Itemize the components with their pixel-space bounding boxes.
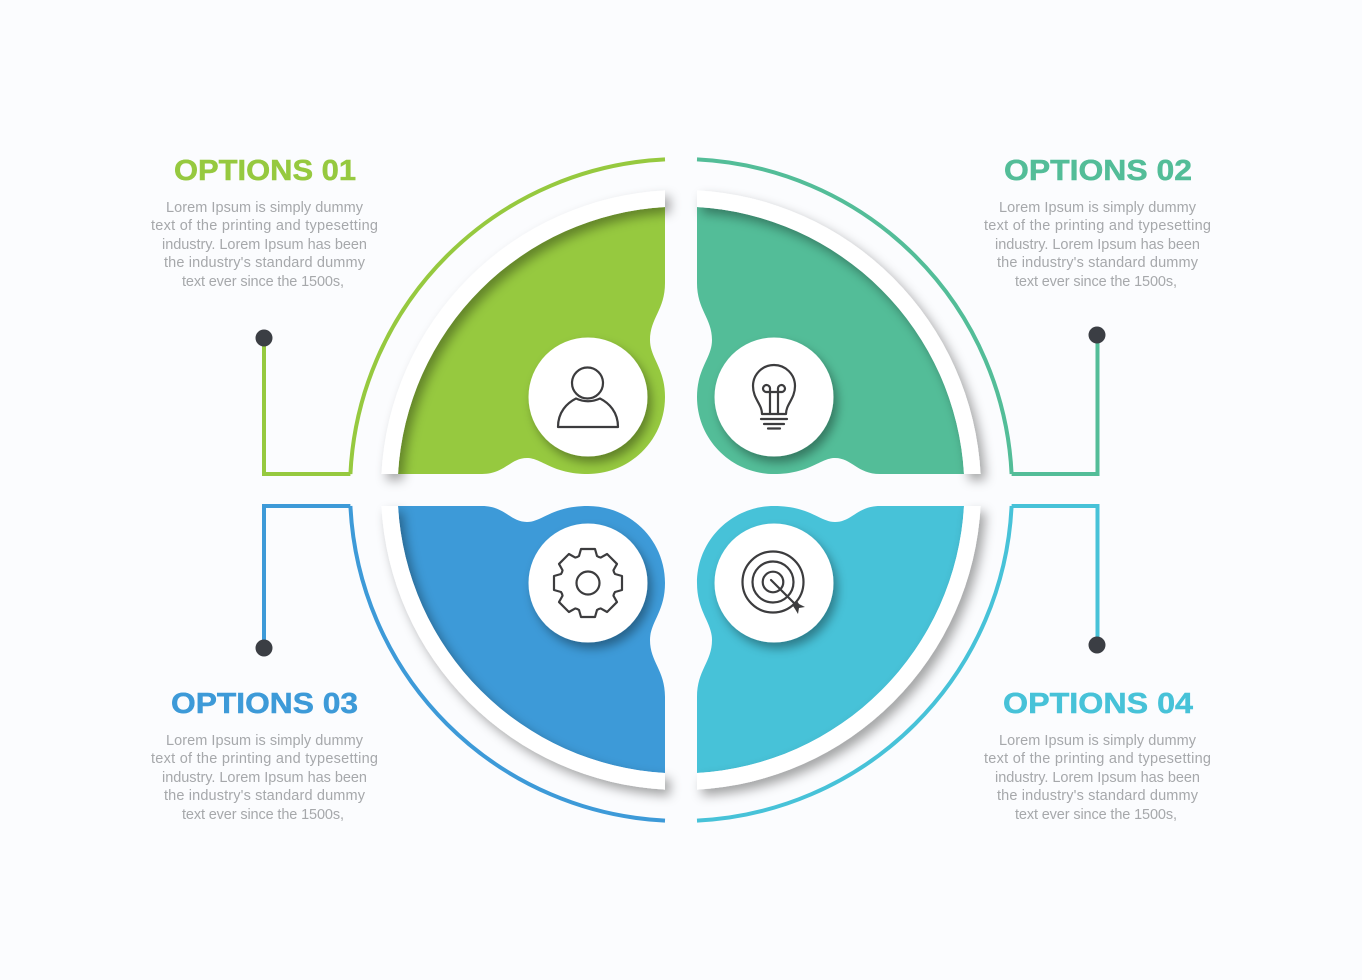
heading 01: OPTIONS 01 [174, 155, 356, 187]
text block 04: industry. Lorem Ipsum has been [995, 770, 1200, 786]
heading 02: OPTIONS 02 [1004, 155, 1192, 187]
panel: options 03 [151, 506, 665, 823]
icon: target [742, 552, 805, 614]
white band 02 [697, 190, 981, 474]
quadrant shape 02 [697, 207, 964, 474]
heading 04: OPTIONS 04 [1003, 688, 1193, 720]
text block 02: industry. Lorem Ipsum has been [995, 237, 1200, 253]
icon disc 02 [714, 338, 834, 456]
connector dot 02 [1088, 326, 1106, 344]
icon: gear [554, 549, 622, 617]
outer arc and connector 02 [697, 159, 1098, 474]
text block 04: text of the printing and typesetting [984, 751, 1211, 767]
outer arc and connector 03 [264, 506, 665, 821]
white band 04 [697, 506, 981, 790]
text block 01: text of the printing and typesetting [151, 218, 378, 234]
icon disc 03 [528, 524, 648, 642]
white band 03 [381, 506, 665, 790]
panel: options 02 [697, 155, 1211, 474]
quadrant shape 01 [398, 207, 665, 474]
connector dot 04 [1088, 636, 1106, 654]
icon disc 04 [714, 524, 834, 642]
heading 03: OPTIONS 03 [171, 688, 358, 720]
connector dot 01 [256, 330, 272, 346]
text block 01 [151, 200, 378, 290]
text block 01: Lorem Ipsum is simply dummy [166, 200, 364, 216]
icon: person [558, 368, 618, 427]
text block 03: the industry's standard dummy [164, 788, 366, 804]
quadrant shape 04 [697, 506, 964, 773]
text block 02 [984, 200, 1211, 290]
outer arc and connector 01 [264, 159, 665, 474]
text block 03: industry. Lorem Ipsum has been [162, 770, 367, 786]
text block 02: the industry's standard dummy [997, 255, 1199, 271]
text block 01: text ever since the 1500s, [182, 274, 344, 290]
text block 02: Lorem Ipsum is simply dummy [999, 200, 1197, 216]
text block 02: text of the printing and typesetting [984, 218, 1211, 234]
text block 03: text of the printing and typesetting [151, 751, 378, 767]
white band 01 [381, 190, 665, 474]
text block 03 [151, 733, 378, 823]
text block 01: the industry's standard dummy [164, 255, 366, 271]
quadrant shape 03 [398, 506, 665, 773]
icon disc 01 [528, 338, 648, 456]
text block 04: text ever since the 1500s, [1015, 807, 1177, 823]
text block 04: Lorem Ipsum is simply dummy [999, 733, 1197, 749]
text block 01: industry. Lorem Ipsum has been [162, 237, 367, 253]
text block 04 [984, 733, 1211, 823]
panel: options 04 [697, 506, 1211, 823]
outer arc and connector 04 [697, 506, 1098, 821]
text block 02: text ever since the 1500s, [1015, 274, 1177, 290]
text block 03: Lorem Ipsum is simply dummy [166, 733, 364, 749]
text block 04: the industry's standard dummy [997, 788, 1199, 804]
connector dot 03 [256, 640, 272, 656]
icon: light bulb [753, 365, 795, 428]
text block 03: text ever since the 1500s, [182, 807, 344, 823]
panel: options 01 [151, 155, 665, 474]
